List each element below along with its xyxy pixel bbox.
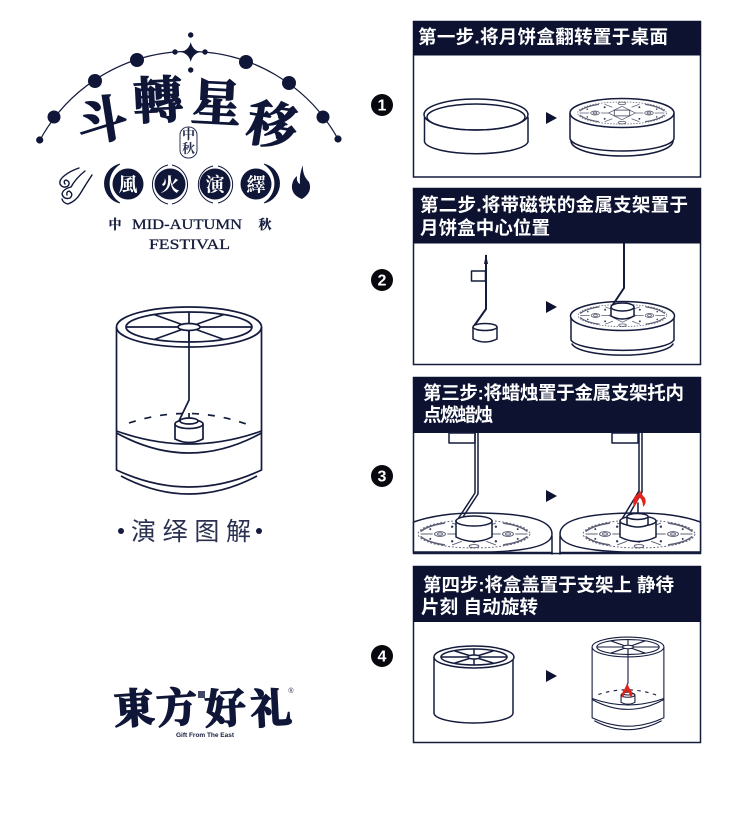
brand logo: 東方好礼 (111, 674, 294, 739)
illustration: assembled lantern (116, 307, 262, 494)
icon: wind (60, 168, 92, 204)
header: step 3: 第三步:将蜡烛置于金属支架托内 (423, 382, 684, 404)
subtitle: Mid-Autumn Festival: 秋 (258, 214, 272, 233)
illustration: lit lantern (592, 637, 664, 730)
icon: lantern flame (622, 683, 632, 698)
seal stamp: 秋 (182, 138, 195, 157)
header: step 1 (413, 21, 701, 56)
header: step 3 (413, 377, 701, 433)
badges: 風火演繹 (104, 164, 280, 204)
header: step 4: 片刻 自动旋转 (421, 596, 538, 618)
title: 斗轉星移: 斗 (71, 78, 132, 157)
icon: candle flame (633, 490, 646, 507)
seal stamp (180, 124, 197, 158)
arrow (546, 112, 557, 124)
badges: 風火演繹: 火 (160, 170, 180, 197)
subtitle: Mid-Autumn Festival (108, 214, 272, 253)
subtitle: Mid-Autumn Festival: MID-AUTUMN (132, 217, 242, 233)
badges: 風火演繹: 演 (205, 170, 227, 197)
badges: 風火演繹: 繹 (246, 170, 266, 197)
brand logo: 東方好礼: 好 (203, 675, 247, 736)
step number 1: 1 (378, 98, 387, 115)
step number 2 (371, 269, 393, 291)
illustration: closed box (434, 646, 514, 723)
illustration: bracket on box (570, 243, 674, 355)
header: step 2: 月饼盒中心位置 (420, 218, 550, 238)
illustration: candle placed (414, 433, 552, 554)
illustration: metal bracket (472, 254, 497, 342)
header: step 3: 点燃蜡烛 (423, 404, 493, 426)
illustration: empty tray (424, 99, 528, 154)
step number 3 (371, 465, 393, 487)
subtitle: Mid-Autumn Festival: 中 (108, 214, 122, 233)
title: 斗轉星移: 轉 (131, 60, 185, 134)
icon: flame (292, 165, 310, 199)
illustration: flipped box (570, 98, 674, 156)
header: step 4: 第四步:将盒盖置于支架上 静待 (423, 574, 674, 596)
step number 3: 3 (378, 469, 387, 486)
header: step 2 (413, 188, 701, 244)
step number 2: 2 (378, 273, 387, 290)
arrow (546, 490, 557, 502)
panel: step 1 (413, 21, 701, 177)
brand logo: 東方好礼: 東 (111, 675, 156, 736)
brand logo: 東方好礼: Gift From The East (176, 732, 235, 739)
brand logo: 東方好礼: 方 (154, 674, 199, 735)
header: step 2: 第二步.将带磁铁的金属支架置于 (420, 194, 688, 216)
seal stamp: 中 (182, 124, 195, 143)
panel: step 4 (413, 566, 701, 742)
panel: step 2 (413, 188, 701, 364)
badges: 風火演繹: 風 (118, 170, 138, 197)
title: 斗轉星移 (71, 60, 303, 162)
subtitle: Mid-Autumn Festival: FESTIVAL (149, 237, 230, 253)
arrow (546, 670, 557, 682)
illustration: candle lit (560, 433, 700, 554)
arrow (546, 301, 557, 313)
brand logo: 東方好礼: 礼 (249, 675, 293, 736)
brand logo: 東方好礼: ® (288, 687, 294, 695)
title: 斗轉星移: 移 (242, 83, 303, 162)
step number 4 (371, 645, 393, 667)
logo: constellation arc (36, 32, 342, 144)
panel: step 3 (413, 377, 701, 554)
caption: 演绎图解: 演绎图解 (131, 518, 251, 546)
step number 1 (371, 94, 393, 116)
title: 斗轉星移: 星 (189, 63, 243, 137)
header: step 1: 第一步.将月饼盒翻转置于桌面 (418, 26, 668, 48)
header: step 4 (413, 566, 701, 622)
step number 4: 4 (378, 649, 387, 666)
